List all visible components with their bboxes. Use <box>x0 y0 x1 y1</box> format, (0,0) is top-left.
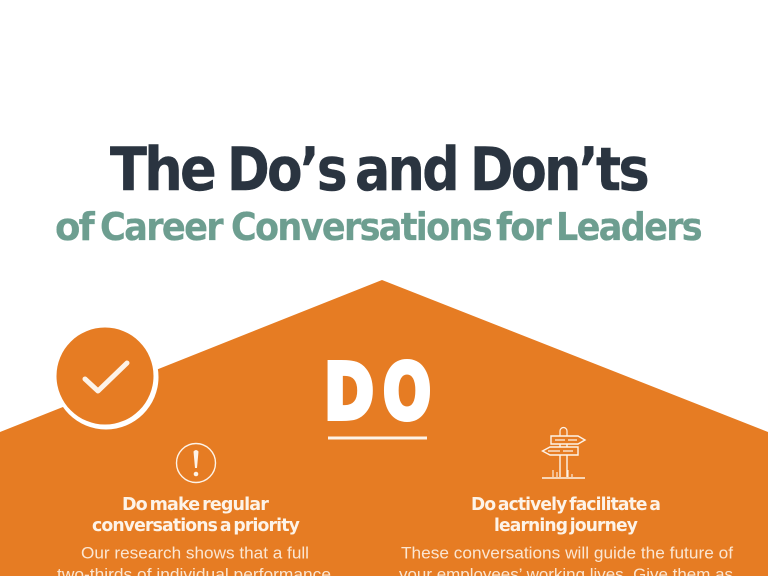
do heading: D <box>324 348 374 438</box>
body: These conversations will guide the future of <box>401 544 733 562</box>
title: and <box>355 135 457 205</box>
subtitle: for <box>496 205 552 249</box>
title: The <box>110 135 214 205</box>
heading <box>92 494 300 536</box>
heading: Do make regular <box>122 494 269 515</box>
heading: Do actively facilitate a <box>471 494 660 515</box>
do heading: O <box>383 348 431 438</box>
subtitle: Leaders <box>556 205 701 249</box>
text block: facilitate a learning journey <box>399 494 733 576</box>
subtitle <box>55 205 701 249</box>
icon: signpost <box>542 428 585 478</box>
heading: conversations a priority <box>92 515 300 536</box>
body <box>399 544 733 576</box>
heading <box>471 494 660 536</box>
title: Do’s <box>227 135 345 205</box>
do underline <box>328 436 427 440</box>
icon: exclamation <box>176 444 216 482</box>
body: Our research shows that a full <box>81 544 309 562</box>
panel: do house shape <box>0 280 768 576</box>
icon: check badge <box>54 324 158 430</box>
do heading <box>324 348 431 438</box>
subtitle: Career <box>100 205 224 249</box>
title: Don’ts <box>470 135 647 205</box>
subtitle: of <box>55 205 95 249</box>
title <box>110 135 647 205</box>
body <box>57 544 331 576</box>
text block: make conversations a priority <box>57 494 331 576</box>
heading: learning journey <box>494 515 638 536</box>
subtitle: Conversations <box>231 205 491 249</box>
